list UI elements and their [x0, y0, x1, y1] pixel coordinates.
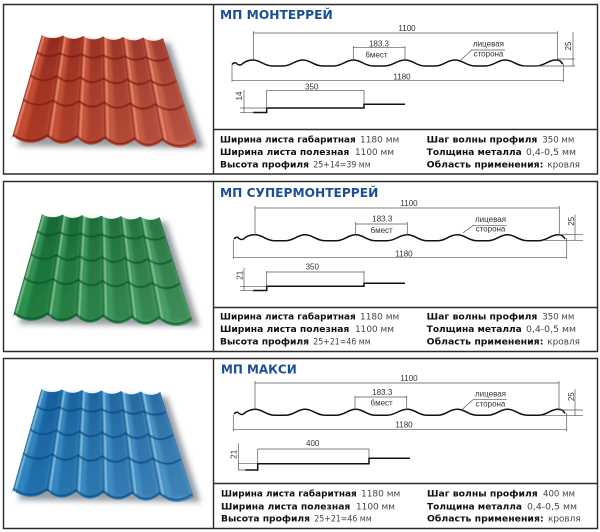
profile cross-section drawing: 1100	[400, 374, 418, 383]
specifications: Толщина металла	[427, 502, 522, 512]
profile cross-section drawing: лицевая	[473, 40, 504, 49]
specifications: 350 мм	[542, 313, 574, 323]
profile cross-section drawing: 1180	[395, 420, 413, 430]
profile cross-section drawing: 183.3	[369, 40, 390, 48]
panel: МП Макси	[0, 358, 598, 528]
specifications: Ширина листа полезная	[221, 502, 351, 512]
specifications: кровля	[547, 161, 580, 171]
specifications: Высота профиля	[221, 515, 310, 525]
specifications: 0,4-0,5 мм	[527, 502, 577, 512]
specifications: кровля	[547, 338, 580, 348]
panel: МП Супермонтеррей	[2, 182, 598, 352]
heading: МП МОНТЕРРЕЙ	[220, 7, 333, 22]
profile cross-section drawing: сторона	[474, 49, 504, 58]
wave step drawing: 21	[236, 270, 244, 280]
specifications: Ширина листа габаритная	[220, 312, 356, 323]
specifications: Область применения:	[427, 337, 543, 348]
wave step drawing	[235, 83, 405, 113]
heading: МП МАКСИ	[221, 361, 297, 376]
panel frame	[4, 4, 598, 174]
profile cross-section drawing: 25	[567, 216, 576, 226]
profile cross-section drawing: 183.3	[372, 388, 393, 397]
specifications: 1180 мм	[360, 136, 399, 146]
wave step drawing: 350	[305, 83, 319, 92]
profile cross-section drawing: лицевая	[475, 215, 506, 224]
profile cross-section drawing: 6мест	[365, 50, 388, 59]
image: green metal roof sheet	[2, 204, 205, 333]
specifications: 1180 мм	[361, 490, 400, 500]
specifications: Высота профиля	[220, 338, 309, 348]
specifications: Шаг волны профиля	[427, 136, 538, 146]
profile cross-section drawing	[233, 374, 583, 431]
profile cross-section drawing: 1180	[393, 72, 411, 82]
wave step drawing: 400	[306, 439, 320, 448]
profile cross-section drawing: лицевая	[475, 390, 506, 399]
specifications	[220, 135, 580, 171]
specifications: 1100 мм	[356, 502, 395, 512]
profile cross-section drawing: 6мест	[371, 399, 393, 408]
specifications: 1100 мм	[355, 325, 394, 335]
specifications: 25+21=46 мм	[313, 338, 371, 348]
specifications	[221, 489, 581, 525]
specifications: Шаг волны профиля	[427, 313, 538, 323]
wave step drawing	[236, 263, 405, 291]
specifications: Ширина листа полезная	[220, 325, 350, 335]
image: blue metal roof sheet	[0, 379, 206, 509]
specifications: 400 мм	[543, 490, 575, 500]
specifications: кровля	[548, 515, 581, 525]
wave step drawing: 350	[306, 263, 320, 272]
profile cross-section drawing: 183.3	[372, 215, 393, 224]
panel: МП Монтеррей	[0, 4, 598, 174]
profile cross-section drawing	[232, 24, 575, 82]
specifications: Толщина металла	[427, 148, 522, 158]
profile cross-section drawing: 1100	[398, 24, 416, 33]
profile cross-section drawing	[233, 199, 583, 259]
profile cross-section drawing: 1100	[400, 199, 418, 208]
specifications	[220, 312, 580, 348]
specifications: Ширина листа полезная	[220, 148, 350, 158]
profile cross-section drawing: 25	[567, 392, 576, 401]
profile cross-section drawing: 1180	[395, 249, 413, 258]
profile cross-section drawing: 25	[564, 41, 573, 50]
specifications: Высота профиля	[220, 161, 309, 171]
specifications: Область применения:	[427, 160, 543, 171]
specifications: 25+14=39 мм	[313, 161, 371, 171]
specifications: 0,4-0,5 мм	[526, 148, 576, 158]
specifications: Шаг волны профиля	[427, 490, 538, 500]
wave step drawing: 14	[235, 91, 244, 100]
wave step drawing: 21	[230, 449, 238, 459]
image: red metal roof sheet	[0, 25, 210, 155]
specifications: Область применения:	[427, 514, 544, 525]
specifications: 1180 мм	[360, 313, 399, 323]
heading: МП СУПЕРМОНТЕРРЕЙ	[220, 185, 378, 200]
profile cross-section drawing: 6мест	[371, 226, 393, 235]
specifications: Ширина листа габаритная	[220, 135, 356, 146]
profile cross-section drawing: сторона	[476, 225, 506, 234]
specifications: Толщина металла	[427, 325, 522, 335]
specifications: 0,4-0,5 мм	[526, 325, 576, 335]
profile cross-section drawing: сторона	[476, 400, 506, 409]
panel frame	[4, 182, 598, 352]
specifications: Ширина листа габаритная	[221, 489, 357, 500]
specifications: 350 мм	[542, 136, 574, 146]
panel frame	[4, 358, 598, 528]
specifications: 25+21=46 мм	[314, 515, 372, 525]
wave step drawing	[230, 439, 410, 470]
specifications: 1100 мм	[355, 148, 394, 158]
